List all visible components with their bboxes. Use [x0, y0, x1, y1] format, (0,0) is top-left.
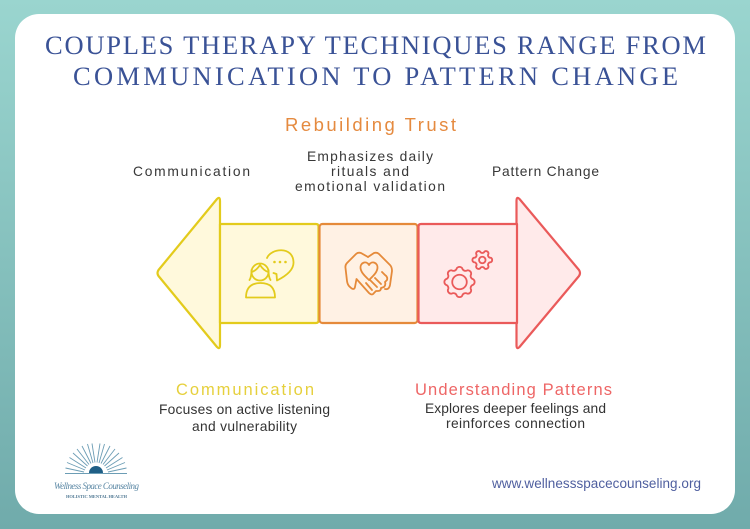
text block: communication: Focuses on active listening	[159, 402, 330, 417]
icon: person with speech bubble	[246, 250, 294, 298]
logo tagline: HOLISTIC MENTAL HEALTH	[66, 494, 127, 499]
logo sun core	[89, 466, 103, 473]
website url: www.wellnessspacecounseling.org	[491, 476, 701, 491]
arrow: right red head	[516, 198, 580, 348]
title	[45, 30, 706, 91]
logo script name: Wellness Space Counseling	[54, 481, 140, 491]
text block: communication: and vulnerability	[192, 419, 297, 434]
logo sunburst	[65, 444, 127, 474]
text block: communication: Communication	[176, 381, 314, 399]
title: COUPLES THERAPY TECHNIQUES RANGE FROM	[45, 30, 706, 60]
label: communication: Communication	[133, 164, 250, 179]
text block: understanding patterns	[415, 381, 612, 431]
text block: rebuilding trust description	[295, 149, 445, 194]
heading: rebuilding trust: Rebuilding Trust	[285, 114, 456, 135]
title: COMMUNICATION TO PATTERN CHANGE	[73, 61, 678, 91]
text block: understanding patterns: reinforces connection	[446, 416, 585, 431]
segment: yellow	[220, 224, 318, 323]
arrow: left yellow head	[158, 198, 220, 348]
label: pattern change: Pattern Change	[492, 164, 599, 179]
text block: understanding patterns: Understanding Patterns	[415, 381, 612, 399]
text block: rebuilding trust description: emotional validation	[295, 179, 445, 194]
segment: orange	[320, 224, 418, 323]
logo: wellness space counseling	[54, 444, 140, 499]
segment: red	[418, 224, 517, 323]
text block: understanding patterns: Explores deeper feelings and	[425, 401, 606, 416]
text block: rebuilding trust description: Emphasizes daily	[307, 149, 433, 164]
text block: communication	[159, 381, 330, 434]
icon: gears	[444, 251, 492, 297]
text block: rebuilding trust description: rituals and	[331, 164, 409, 179]
arrow diagram	[158, 198, 580, 348]
icon: hands holding heart	[345, 253, 392, 294]
